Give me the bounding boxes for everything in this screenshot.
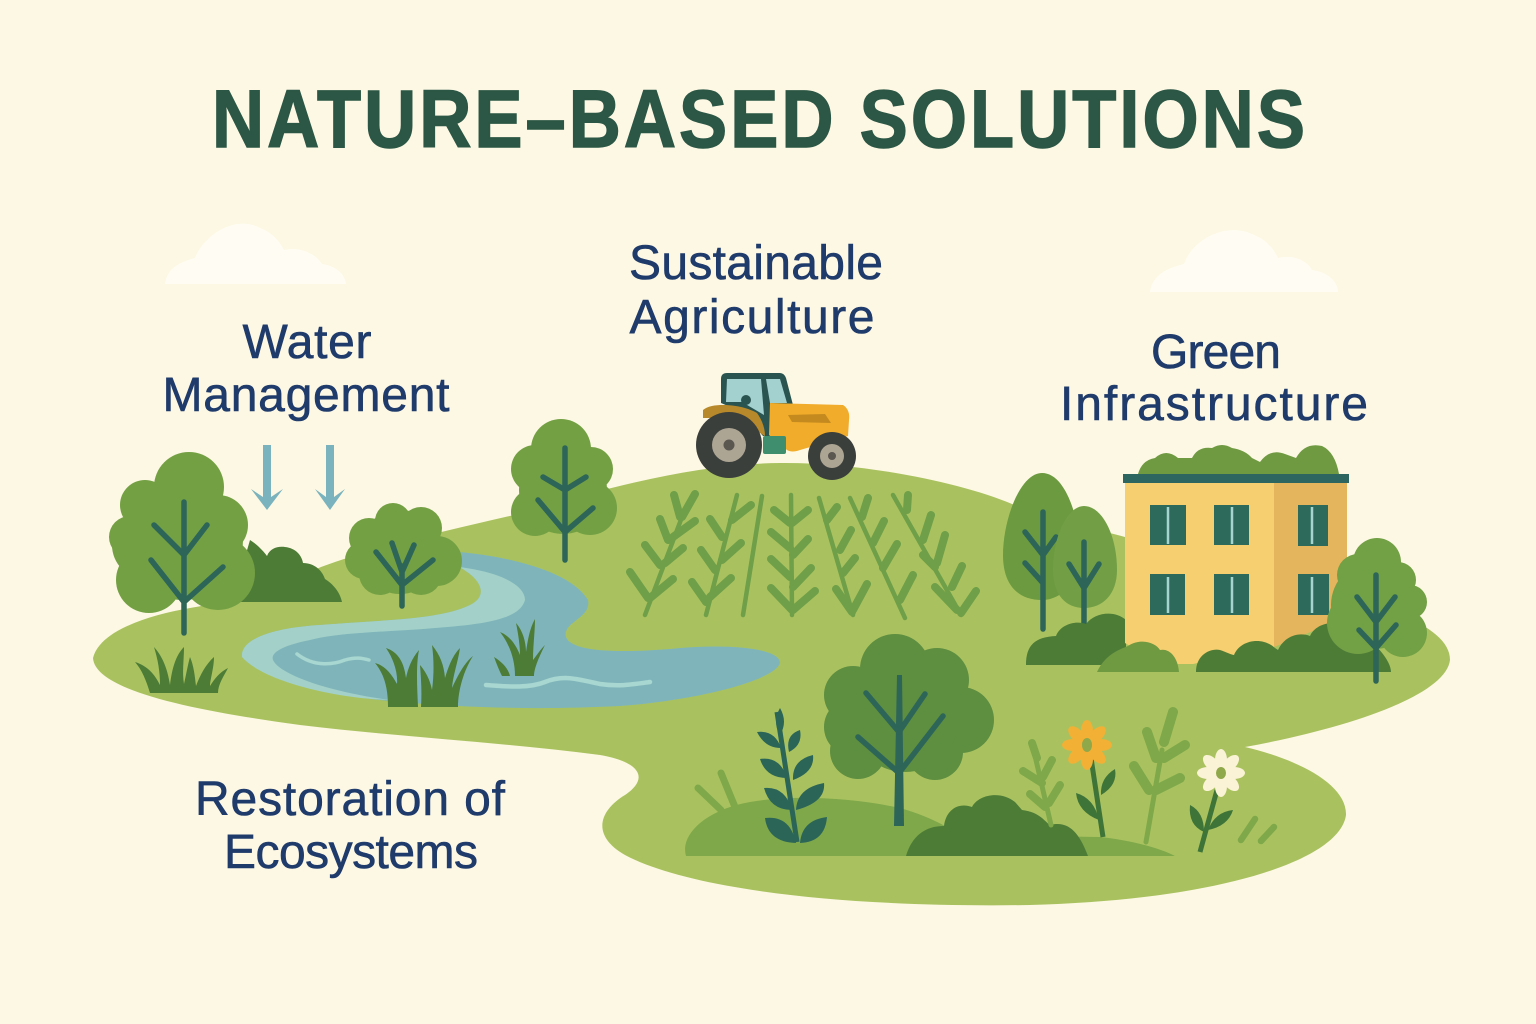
- windows: [1150, 505, 1329, 615]
- plant: tall: [1134, 712, 1185, 842]
- bush: behind left tree: [232, 540, 342, 602]
- sprigs: foreground left: [698, 773, 735, 810]
- bush: building base right: [1196, 623, 1391, 672]
- green roof: [1138, 445, 1339, 474]
- trees: beside building: [1003, 473, 1117, 629]
- tractor small wheel: [808, 432, 856, 480]
- heading: Sustainable Agriculture: Sustainable: [629, 237, 883, 290]
- tractor cab: [721, 373, 793, 436]
- tree: foreground large: [824, 634, 994, 826]
- fern: foreground: [757, 708, 827, 843]
- heading: Water Management: [162, 316, 450, 422]
- arrows: water flow down: [251, 445, 345, 510]
- heading: Water Management: Management: [162, 369, 450, 422]
- plants and flowers: [1023, 712, 1274, 852]
- heading: Green Infrastructure: Green: [1151, 326, 1281, 379]
- tractor body: [769, 403, 849, 452]
- crops: [630, 494, 976, 618]
- heading: Water Management: Water: [242, 316, 372, 369]
- tree: large left: [109, 452, 255, 633]
- heading: Sustainable Agriculture: Agriculture: [630, 291, 874, 344]
- river highlight: [242, 567, 525, 700]
- grass: left: [135, 647, 228, 693]
- building side wall: [1274, 483, 1347, 647]
- heading: Restoration of Ecosystems: Ecosystems: [224, 826, 478, 879]
- tractor: [696, 373, 856, 480]
- reeds: pond center: [375, 645, 473, 707]
- orange flower: [1062, 720, 1115, 837]
- heading: Green Infrastructure: [1060, 326, 1368, 431]
- heading: Sustainable Agriculture: [629, 237, 883, 344]
- heading: Green Infrastructure: Infrastructure: [1060, 378, 1368, 431]
- plant: small: [1023, 743, 1060, 825]
- landscape: green land: [93, 463, 1450, 905]
- mound: foreground: [685, 798, 1175, 856]
- tree: hilltop: [511, 419, 617, 560]
- bush: left of building: [1026, 614, 1126, 665]
- building: [1123, 445, 1349, 664]
- heading: Restoration of Ecosystems: Restoration of: [195, 773, 506, 826]
- heading: Restoration of Ecosystems: [195, 773, 506, 879]
- building front wall: [1125, 483, 1274, 664]
- bush: building base mid: [1097, 642, 1179, 672]
- tractor green box: [763, 436, 786, 454]
- river: [242, 552, 780, 708]
- cloud: left: [165, 224, 346, 284]
- water ripples: [297, 654, 650, 687]
- title: NATURE–BASED SOLUTIONS: [212, 74, 1305, 165]
- tree: right of building: [1327, 538, 1427, 681]
- bush: foreground: [906, 795, 1088, 856]
- tree: small left: [345, 503, 462, 606]
- small leaves: [1241, 819, 1274, 841]
- reeds: pond right: [494, 619, 545, 676]
- roof line: [1123, 474, 1349, 483]
- cloud: right: [1150, 230, 1338, 292]
- tractor big wheel: [696, 412, 762, 478]
- tractor fender: [703, 405, 765, 436]
- white flower: [1190, 749, 1245, 852]
